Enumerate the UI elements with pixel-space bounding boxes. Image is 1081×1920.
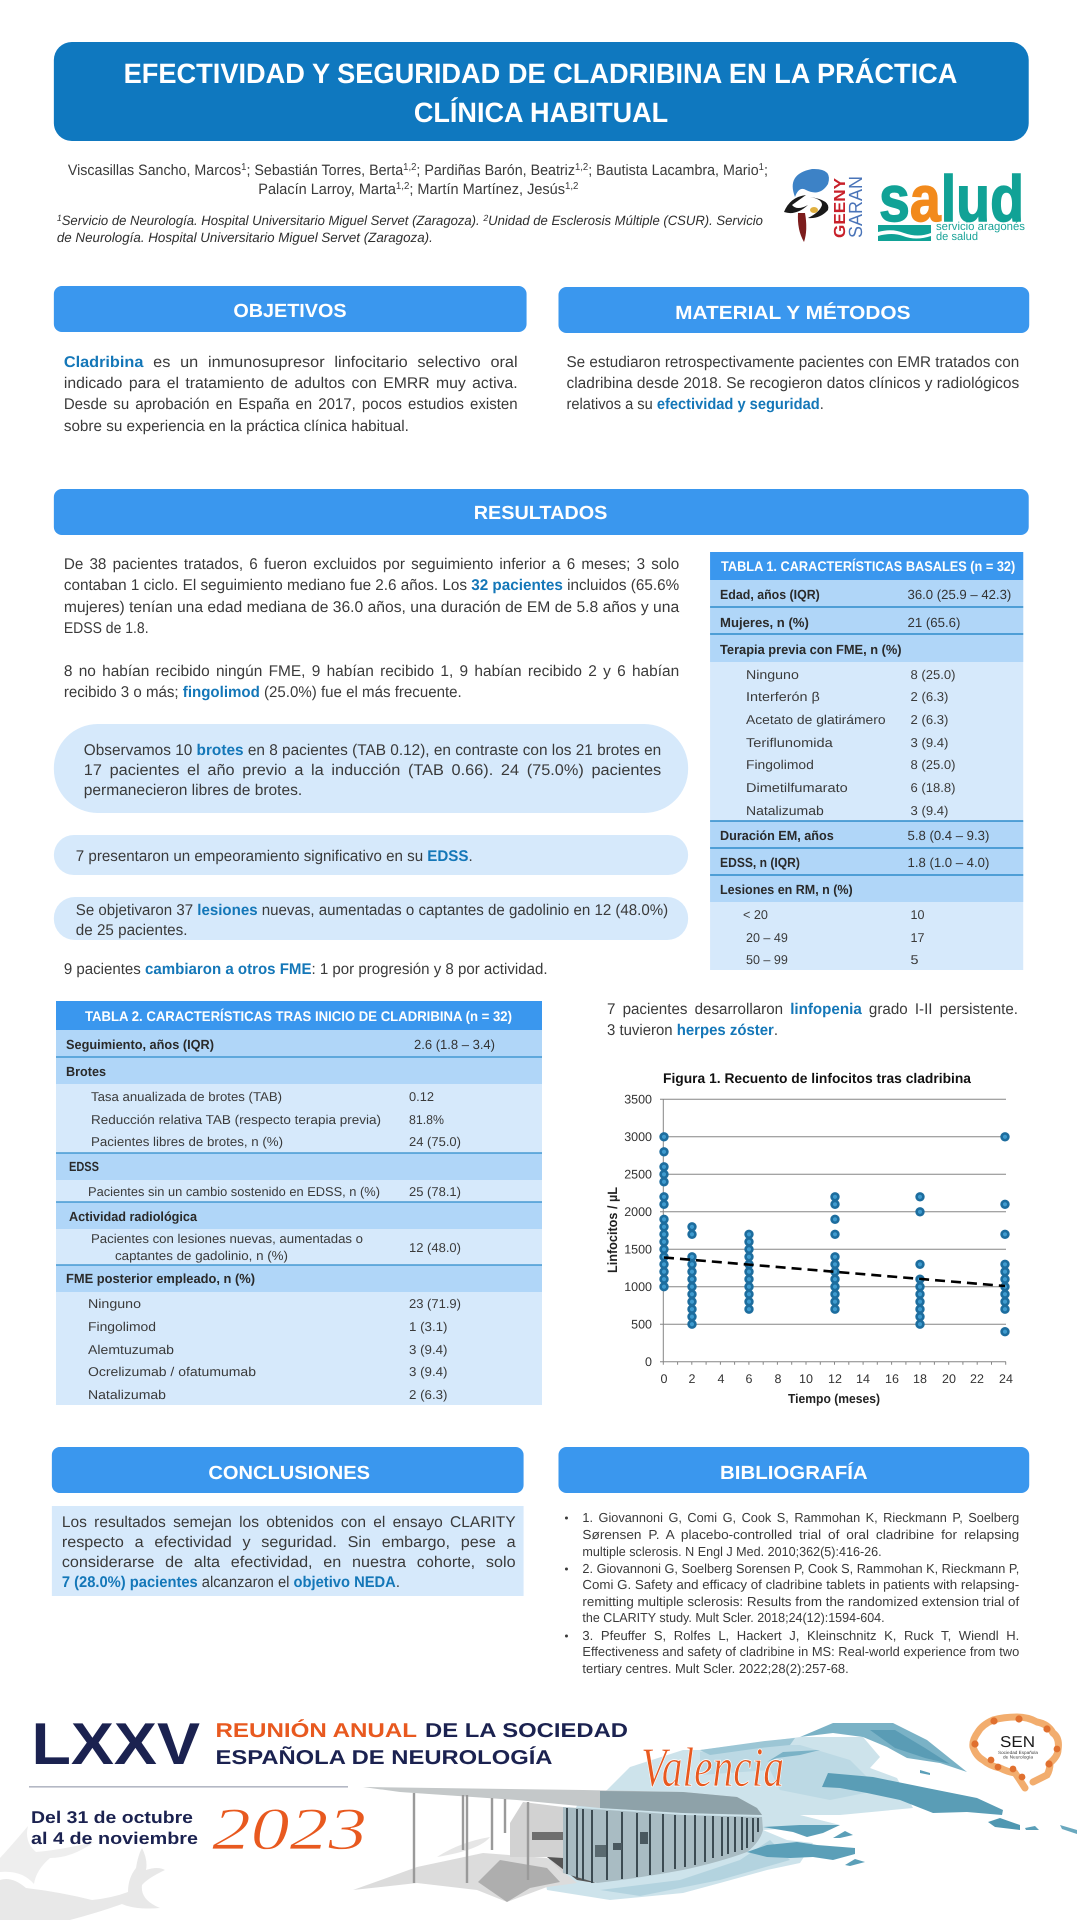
table 2 rows: 2.6 (1.8 – 3.4) [414, 1037, 495, 1052]
table 1 rows: 5 [911, 952, 919, 967]
SEN logo: SEN [1000, 1734, 1035, 1751]
reference list: multiple sclerosis. N Engl J Med. 2010;362(5):416-26. [582, 1544, 882, 1559]
table 2 [56, 1001, 542, 1405]
dates: Del 31 de octubre [31, 1808, 193, 1827]
table 1 rows: Acetato de glatirámero [746, 712, 886, 727]
table 1 title: TABLA 1. CARACTERÍSTICAS BASALES (n = 32) [721, 558, 1015, 574]
heading: resultados [54, 489, 1029, 535]
logo: salud: servicio aragonés [936, 221, 1025, 233]
footer banner [0, 1711, 1077, 1920]
authors: ; Sebastián Torres, Berta [246, 162, 404, 179]
text: patient summary: mujeres) tenían una edad mediana de 36.0 años, una duración de EM de 5.8 años y una [64, 599, 680, 616]
authors: ; Bautista Lacambra, Mario [588, 162, 759, 179]
logo: salud: de salud [936, 231, 978, 243]
text: previous treatments: recibido 3 o más; fingolimod (25.0%) fue el más frecuente. [64, 684, 462, 701]
table 2 rows: Pacientes libres de brotes, n (%) [91, 1134, 283, 1149]
callout: brotes: 17 pacientes el año previo a la inducción (TAB 0.66). 24 (75.0%) pacientes [84, 762, 661, 779]
table 1 rows: Interferón β [746, 689, 820, 704]
y axis tick labels: 1500 [624, 1242, 652, 1256]
authors: Palacín Larroy, Marta [258, 181, 400, 198]
text: conclusiones: considerarse de alta efectividad, en nuestra cohorte, solo [62, 1554, 516, 1571]
table 1 rows: 5.8 (0.4 – 9.3) [908, 828, 989, 843]
reference list: the CLARITY study. Mult Scler. 2018;24(12):1594-604. [582, 1610, 885, 1625]
text: material y metodos [566, 354, 1019, 413]
table 1 rows: 20 – 49 [746, 930, 788, 945]
x axis tick labels: 24 [999, 1372, 1013, 1386]
table 2 rows: Brotes [66, 1064, 106, 1079]
heading: objetivos: OBJETIVOS [233, 301, 347, 322]
reference list: Comi G. Safety and efficacy of cladribine tablets in patients with relapsing- [582, 1577, 1019, 1592]
congress name: DE LA SOCIEDAD [425, 1720, 628, 1742]
callout: lesiones: Se objetivaron 37 lesiones nuevas, aumentadas o captantes de gadolinio en 12 (48.0%) [76, 902, 668, 919]
x axis tick labels: 18 [913, 1372, 927, 1386]
x axis tick labels [661, 1372, 1013, 1386]
table 1 rows: 3 (9.4) [911, 735, 948, 750]
affiliations: 1 [57, 213, 62, 223]
authors: ; Pardiñas Barón, Beatriz [416, 162, 575, 179]
table 2 rows [66, 1037, 495, 1402]
year: 2023 [212, 1796, 367, 1862]
affiliations: 2 [482, 213, 488, 223]
table 2 rows: 25 (78.1) [409, 1184, 461, 1199]
y axis tick labels: 500 [631, 1318, 652, 1332]
panel: objetivos [54, 286, 527, 435]
affiliations [57, 213, 763, 245]
title banner [54, 42, 1029, 141]
table 2 rows: EDSS [69, 1159, 99, 1174]
text: objetivos: Cladribina es un inmunosupresor linfocitario selectivo oral [64, 354, 518, 371]
table 2 rows: Ninguno [88, 1296, 141, 1311]
table 1 rows: Mujeres, n (%) [720, 615, 809, 630]
table 1 rows: 21 (65.6) [908, 615, 960, 630]
x axis tick labels: 2 [689, 1372, 696, 1386]
table 1 rows: 10 [911, 907, 924, 922]
x axis tick labels: 0 [661, 1372, 668, 1386]
table 1 rows: Natalizumab [746, 803, 824, 818]
text: seguridad: 7 pacientes desarrollaron linfopenia grado I-II persistente. [607, 1001, 1018, 1018]
heading: bibliografia: BIBLIOGRAFÍA [720, 1462, 868, 1484]
table 1 rows: 17 [911, 930, 924, 945]
title banner: EFECTIVIDAD Y SEGURIDAD DE CLADRIBINA EN LA PRÁCTICA [124, 58, 957, 89]
table 1 rows: Teriflunomida [746, 735, 834, 750]
scatter chart: linfocitos [605, 1070, 1013, 1406]
text: conclusiones: respecto a efectividad y seguridad. Sin embargo, pese a [62, 1534, 516, 1551]
x axis tick labels: 14 [856, 1372, 870, 1386]
table 1 rows: 50 – 99 [746, 952, 788, 967]
x axis tick labels: 8 [775, 1372, 782, 1386]
text: material y metodos: Se estudiaron retrospectivamente pacientes con EMR tratados con [566, 354, 1019, 371]
text: patient summary: contaban 1 ciclo. El seguimiento mediano fue 2.6 años. Los 32 pacientes incluidos (65.6% [64, 577, 679, 594]
table 1 rows: 2 (6.3) [911, 689, 948, 704]
table 1 rows: 2 (6.3) [911, 712, 948, 727]
heading: conclusiones [52, 1447, 524, 1493]
callout: brotes: permanecieron libres de brotes. [84, 782, 302, 799]
y axis tick labels: 0 [645, 1355, 652, 1369]
table 1 rows: < 20 [743, 907, 768, 922]
text: material y metodos: cladribina desde 2018. Se recogieron datos clínicos y radiológicos [566, 375, 1019, 392]
panel: bibliografia [558, 1447, 1029, 1676]
table 1 rows: 1.8 (1.0 – 4.0) [908, 855, 989, 870]
data points [661, 1133, 1008, 1335]
y axis tick labels: 3500 [624, 1092, 652, 1106]
table 1 rows: 8 (25.0) [911, 667, 955, 682]
text: seguridad: 3 tuvieron herpes zóster. [607, 1022, 778, 1039]
table 2 rows: Pacientes con lesiones nuevas, aumentadas o [91, 1231, 363, 1246]
table 1 rows: Lesiones en RM, n (%) [720, 882, 853, 897]
text: cambio de FME: 9 pacientes cambiaron a otros FME: 1 por progresión y 8 por actividad. [64, 961, 548, 978]
table 2 rows: Alemtuzumab [88, 1342, 174, 1357]
table 2 rows: 3 (9.4) [409, 1342, 448, 1357]
heading: bibliografia [558, 1447, 1029, 1493]
SEN logo: de Neurología [1003, 1754, 1034, 1760]
chart title: Figura 1. Recuento de linfocitos tras cladribina [663, 1070, 971, 1086]
affiliations: Unidad de Esclerosis Múltiple (CSUR). Servicio [488, 213, 763, 228]
reference list: 2. Giovannoni G, Soelberg Sorensen P, Cook S, Rammohan K, Rieckmann P, [582, 1561, 1019, 1576]
panel: material y metodos [558, 287, 1029, 413]
authors: 1,2 [396, 181, 410, 192]
x axis tick labels: 20 [942, 1372, 956, 1386]
watercolor wash [543, 1723, 1077, 1900]
text: conclusiones [52, 1506, 524, 1596]
table 1 rows: 6 (18.8) [911, 780, 955, 795]
congress name: ESPAÑOLA DE NEUROLOGÍA [216, 1746, 552, 1769]
y axis tick labels: 3000 [624, 1130, 652, 1144]
table 1 rows: Fingolimod [746, 757, 814, 772]
background map veins [0, 1826, 165, 1920]
text: patient summary: EDSS de 1.8. [64, 620, 149, 637]
x axis tick labels: 4 [718, 1372, 725, 1386]
callout: edss: 7 presentaron un empeoramiento significativo en su EDSS. [76, 848, 473, 865]
y axis title: Linfocitos / µL [605, 1187, 620, 1273]
table 1 rows: Duración EM, años [720, 828, 834, 843]
heading: resultados: RESULTADOS [474, 503, 607, 524]
table 1 rows: Edad, años (IQR) [720, 587, 820, 602]
table 1 rows: EDSS, n (IQR) [720, 855, 800, 870]
authors [68, 162, 768, 198]
text: previous treatments: 8 no habían recibido ningún FME, 9 habían recibido 1, 9 habían recibido 2 y 6 habían [64, 663, 679, 680]
reference list: remitting multiple sclerosis: Results from the randomized extension trial of [582, 1594, 1020, 1609]
panel: conclusiones [52, 1447, 524, 1596]
table 1 rows: Dimetilfumarato [746, 780, 848, 795]
affiliations: de Neurología. Hospital Universitario Miguel Servet (Zaragoza). [57, 230, 433, 245]
logo: GEENY SARAN [784, 169, 867, 242]
x axis tick labels: 22 [970, 1372, 984, 1386]
congress name: REUNIÓN ANUAL [216, 1719, 417, 1742]
text: material y metodos: relativos a su efectividad y seguridad. [566, 396, 824, 413]
y axis tick labels: 1000 [624, 1280, 652, 1294]
table 1 rows: 36.0 (25.9 – 42.3) [908, 587, 1011, 602]
table 2 rows: 0.12 [409, 1089, 434, 1104]
y axis tick labels: 2000 [624, 1205, 652, 1219]
table 2 rows: 2 (6.3) [409, 1387, 448, 1402]
table 2 rows: Actividad radiológica [69, 1209, 198, 1224]
table 2 rows: Reducción relativa TAB (respecto terapia previa) [91, 1112, 381, 1127]
logo: GEENY SARAN: SARAN [846, 176, 867, 238]
text: objetivos [64, 354, 518, 435]
text: previous treatments [64, 663, 679, 701]
heading: conclusiones: CONCLUSIONES [208, 1463, 370, 1484]
SEN logo: Sociedad Española [998, 1750, 1039, 1755]
x axis title: Tiempo (meses) [788, 1391, 880, 1406]
table 2 title: TABLA 2. CARACTERÍSTICAS TRAS INICIO DE CLADRIBINA (n = 32) [85, 1008, 512, 1024]
reference list: tertiary centres. Mult Scler. 2022;28(2):257-68. [582, 1661, 849, 1676]
y axis tick labels [624, 1092, 652, 1369]
table 1 rows: Ninguno [746, 667, 799, 682]
heading: material y metodos: MATERIAL Y MÉTODOS [675, 302, 911, 324]
reference list [565, 1510, 1020, 1676]
table 2 rows: Tasa anualizada de brotes (TAB) [91, 1089, 282, 1104]
x axis tick labels: 16 [885, 1372, 899, 1386]
callout: lesiones: de 25 pacientes. [76, 922, 187, 939]
authors: Viscasillas Sancho, Marcos [68, 162, 250, 179]
congress name [216, 1719, 628, 1769]
table 1 rows: Terapia previa con FME, n (%) [720, 642, 902, 657]
table 2 rows: Ocrelizumab / ofatumumab [88, 1364, 256, 1379]
table 2 rows: 3 (9.4) [409, 1364, 448, 1379]
text: patient summary [64, 556, 680, 637]
table 2 rows: Natalizumab [88, 1387, 166, 1402]
x axis tick labels: 10 [799, 1372, 813, 1386]
table 2 rows: Fingolimod [88, 1319, 156, 1334]
reference list: Sørensen P. A placebo-controlled trial of oral cladribine for relapsing [582, 1527, 1019, 1542]
table 2 rows: Pacientes sin un cambio sostenido en EDSS, n (%) [88, 1184, 380, 1199]
text: objetivos: indicado para el tratamiento de adultos con EMRR muy activa. [64, 375, 518, 392]
affiliations: Servicio de Neurología. Hospital Universitario Miguel Servet (Zaragoza). [62, 213, 483, 228]
table 2 rows: Seguimiento, años (IQR) [66, 1037, 214, 1052]
table 2 rows: 24 (75.0) [409, 1134, 461, 1149]
text: objetivos: Desde su aprobación en España en 2017, pocos estudios existen [64, 396, 518, 413]
table 1 [710, 552, 1023, 970]
heading: material y metodos [558, 287, 1029, 333]
x axis tick labels: 6 [746, 1372, 753, 1386]
text: conclusiones: Los resultados semejan los obtenidos con el ensayo CLARITY [62, 1514, 516, 1531]
text: conclusiones: 7 (28.0%) pacientes alcanzaron el objetivo NEDA. [62, 1574, 400, 1591]
table 1 rows: 8 (25.0) [911, 757, 955, 772]
authors: ; [764, 162, 768, 179]
table 2 rows: 12 (48.0) [409, 1240, 461, 1255]
reference list: 3. Pfeuffer S, Rolfes L, Hackert J, Kleinschnitz K, Ruck T, Wiendl H. [582, 1628, 1019, 1643]
callout: brotes: Observamos 10 brotes en 8 pacientes (TAB 0.12), en contraste con los 21 brotes en [84, 742, 661, 759]
table 2 rows: 1 (3.1) [409, 1319, 448, 1334]
table 2 rows: 81.8% [409, 1112, 444, 1127]
authors: 1,2 [575, 162, 589, 173]
table 1 rows [720, 587, 1011, 967]
city name: Valencia [641, 1737, 784, 1799]
SEN logo [971, 1715, 1060, 1788]
logo: salud: salud [879, 162, 1024, 235]
authors: 1 [759, 162, 764, 173]
title banner: CLÍNICA HABITUAL [414, 97, 668, 128]
text: seguridad [607, 1001, 1018, 1039]
congress number: LXXV [32, 1711, 200, 1777]
dates: al 4 de noviembre [31, 1829, 198, 1848]
callout: edss [54, 835, 688, 875]
building illustration [353, 1787, 763, 1902]
x axis tick labels: 12 [828, 1372, 842, 1386]
dates [31, 1808, 198, 1848]
text: objetivos: sobre su experiencia en la práctica clínica habitual. [64, 418, 409, 435]
table 2 rows: 23 (71.9) [409, 1296, 461, 1311]
authors: ; Martín Martínez, Jesús [409, 181, 565, 198]
authors: 1 [241, 162, 247, 173]
authors: 1,2 [565, 181, 579, 192]
table 1 rows: 3 (9.4) [911, 803, 948, 818]
callout: lesiones [54, 897, 688, 940]
trend line [664, 1258, 1005, 1286]
callout: brotes [54, 724, 688, 813]
reference list: Effectiveness and safety of cladribine in MS: Real-world experience from two [582, 1644, 1019, 1659]
heading: objetivos [54, 286, 527, 332]
y axis tick labels: 2500 [624, 1168, 652, 1182]
text: patient summary: De 38 pacientes tratados, 6 fueron excluidos por seguimiento inferior a 6 meses; 3 solo [64, 556, 679, 573]
reference list: 1. Giovannoni G, Comi G, Cook S, Rammohan K, Rieckmann P, Soelberg [582, 1510, 1019, 1525]
logo: GEENY SARAN: GEENY [832, 178, 849, 238]
authors: 1,2 [403, 162, 417, 173]
table 2 rows: captantes de gadolinio, n (%) [115, 1248, 288, 1263]
table 2 rows: FME posterior empleado, n (%) [66, 1271, 255, 1286]
